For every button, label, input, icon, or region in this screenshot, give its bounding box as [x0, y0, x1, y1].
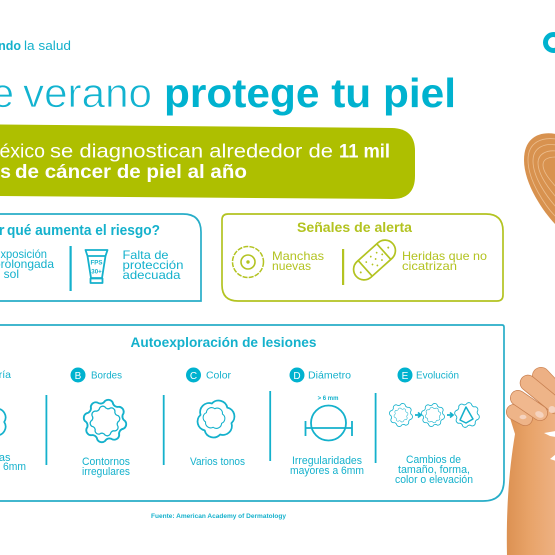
column C: color	[186, 368, 245, 468]
photo: arm with hand	[507, 376, 555, 555]
tagline	[0, 39, 71, 53]
column D: diámetro: mayores a 6mm	[290, 465, 364, 477]
banner: de cáncer de piel al año	[15, 161, 247, 183]
column D: diámetro: > 6 mm	[318, 396, 338, 402]
banner: se diagnostican alrededor de	[50, 140, 333, 162]
banner	[0, 124, 415, 199]
column B: bordes: Contornos	[82, 456, 130, 468]
icon: sunscreen tube: FPS	[90, 260, 103, 266]
logo	[546, 34, 555, 50]
photo: wooden heart brush	[524, 133, 555, 225]
panel: por qué aumenta el riesgo	[0, 214, 201, 301]
heading: señales: Señales de alerta	[297, 219, 412, 235]
column B: bordes	[70, 368, 130, 478]
icon: bandage	[349, 236, 400, 284]
column B: bordes: B	[75, 371, 82, 382]
title: verano	[23, 70, 152, 116]
column E: evolución: tamaño, forma,	[398, 464, 470, 476]
text: exposición prolongada	[0, 247, 54, 281]
source: Fuente: American Academy of Dermatology	[151, 513, 287, 520]
column A: asimetría	[0, 369, 26, 473]
column E: evolución: color o elevación	[395, 474, 473, 486]
heading: autoexploración: Autoexploración de lesiones	[130, 334, 317, 350]
text: heridas	[402, 249, 487, 273]
column D: diámetro: Diámetro	[308, 370, 351, 382]
text: manchas nuevas	[272, 249, 324, 273]
text: manchas nuevas: nuevas	[272, 259, 311, 273]
column E: evolución: E	[402, 371, 409, 382]
text: falta de protección: Falta de	[122, 248, 169, 262]
column B: bordes: Bordes	[91, 370, 122, 382]
column D: diámetro	[290, 368, 364, 477]
column E: evolución: Cambios de	[406, 454, 461, 466]
tagline: la salud	[24, 39, 71, 53]
column C: color: Color	[206, 370, 231, 382]
column D: diámetro: Irregularidades	[292, 455, 362, 467]
column A: asimetría: 6mm	[3, 461, 26, 473]
panel: autoexploración de lesiones	[0, 325, 504, 501]
text: falta de protección: protección	[122, 258, 184, 272]
nails	[520, 415, 526, 419]
panel: señales de alerta	[222, 214, 503, 301]
text: falta de protección: adecuada	[122, 268, 181, 282]
text: heridas: Heridas que no	[402, 249, 487, 263]
icon: sunscreen tube: 30+	[91, 268, 102, 276]
column E: evolución	[389, 368, 479, 486]
text: heridas: cicatrizan	[402, 259, 457, 273]
text: manchas nuevas: Manchas	[272, 249, 324, 263]
column B: bordes: irregulares	[82, 466, 130, 478]
title	[0, 70, 456, 116]
column D: diámetro: D	[293, 371, 301, 382]
column C: color: C	[190, 371, 197, 382]
icon: sunscreen tube	[86, 250, 108, 283]
title: protege tu piel	[164, 70, 456, 116]
text: falta de protección	[122, 248, 184, 282]
fingers	[514, 376, 555, 418]
column C: color: Varios tonos	[190, 456, 245, 468]
icon: mancha	[232, 246, 264, 278]
banner: 11 mil	[339, 140, 390, 162]
heading: riesgo: qué aumenta el riesgo?	[7, 222, 160, 239]
column E: evolución: Evolución	[416, 370, 459, 382]
sunscreen cream	[544, 431, 555, 461]
